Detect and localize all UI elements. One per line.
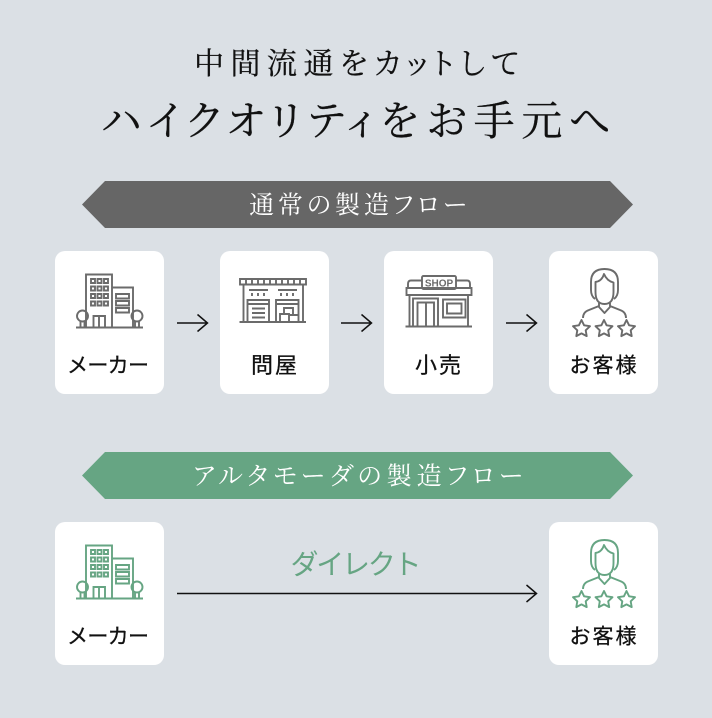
label: maker (direct): メーカー (67, 626, 149, 648)
icon: shop: SHOP (425, 278, 453, 290)
label: maker: メーカー (67, 354, 149, 378)
card: retail (384, 251, 493, 394)
banner: Altamoda flow (82, 452, 633, 499)
arrow (341, 314, 372, 332)
icon: office building (76, 274, 143, 328)
arrow: direct (177, 585, 536, 602)
arrow (506, 314, 536, 332)
card: customer (direct) (549, 522, 658, 665)
icon: customer with stars (573, 269, 635, 336)
icon: shop (406, 276, 472, 326)
banner: standard flow: 通常の製造フロー (249, 192, 467, 220)
label: wholesaler: 問屋 (251, 353, 297, 378)
label: customer (direct): お客様 (570, 626, 636, 648)
card: maker (55, 251, 164, 394)
label: direct: ダイレクト (290, 549, 422, 580)
icon: customer with stars green (573, 540, 635, 607)
icon: office building green (76, 546, 143, 598)
banner: standard flow (82, 181, 633, 228)
banner: Altamoda flow: アルタモーダの製造フロー (193, 462, 523, 490)
card: maker (direct) (55, 522, 164, 665)
card: customer (549, 251, 658, 394)
arrow (177, 314, 208, 332)
title: 中間流通をカットして (194, 48, 518, 81)
title: ハイクオリティをお手元へ (102, 98, 610, 144)
label: customer: お客様 (570, 354, 636, 378)
icon: warehouse (240, 279, 306, 322)
title (102, 48, 610, 144)
label: retail: 小売 (415, 353, 461, 378)
card: wholesaler (220, 251, 329, 394)
